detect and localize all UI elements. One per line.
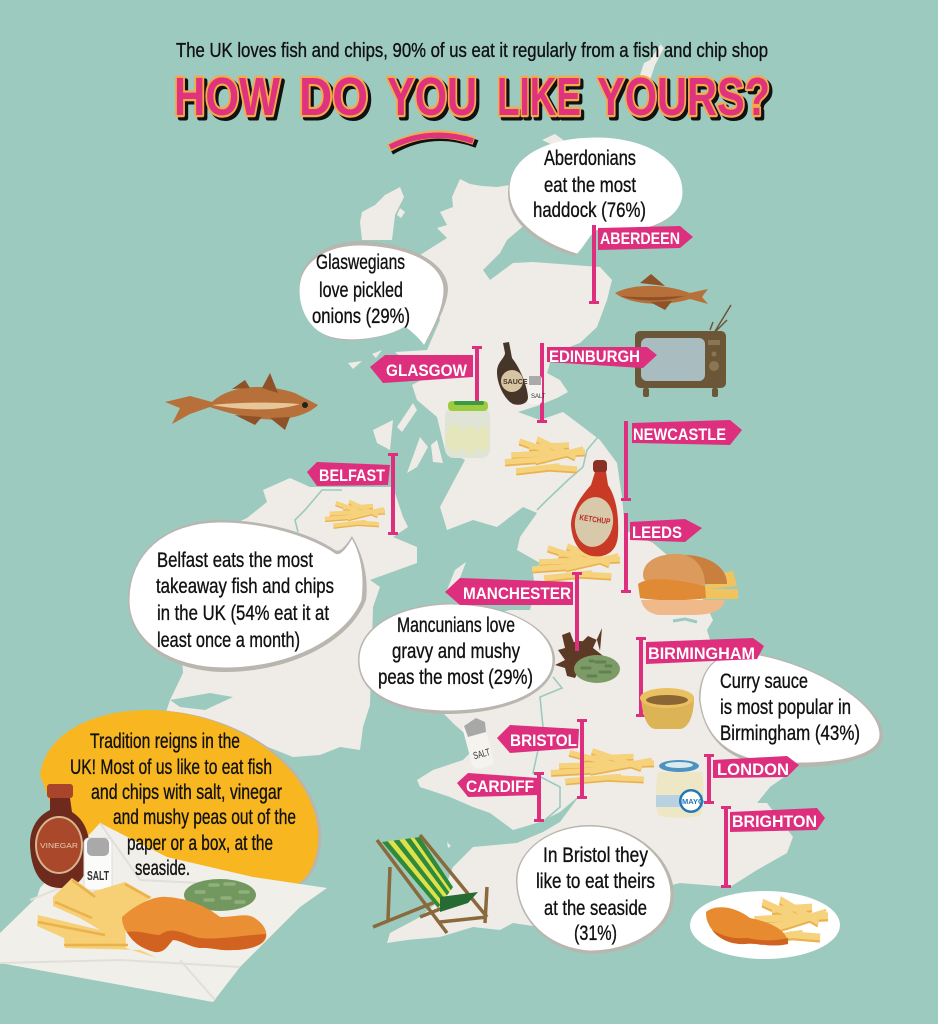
banner: Glasgow	[370, 346, 482, 407]
icon: salt shaker: SALT	[472, 747, 491, 762]
bubble: Belfast: Belfast eats the most	[157, 549, 313, 572]
title: YOURS?	[597, 67, 770, 127]
title: YOURS?	[600, 70, 773, 130]
icon: salt shaker	[84, 838, 112, 890]
banner: Belfast	[307, 453, 398, 535]
panel: tradition callout: and mushy peas out of the	[113, 806, 296, 829]
title: LIKE	[497, 67, 581, 127]
bubble: Aberdeen: haddock (76%)	[533, 199, 646, 222]
bubble: Birmingham: is most popular in	[720, 696, 851, 719]
title: YOU	[387, 67, 477, 127]
banner: Bristol	[497, 719, 587, 799]
bubble: Manchester: Mancunians love	[397, 614, 515, 637]
icon: ketchup bottle: KETCHUP	[579, 513, 611, 526]
icon: ketchup bottle	[571, 460, 618, 556]
icon: mushy peas	[184, 879, 256, 911]
panel: tradition callout: paper or a box, at the	[127, 832, 273, 855]
banner: Brighton	[721, 806, 825, 888]
panel: tradition callout: seaside.	[135, 857, 190, 880]
bubble: Glasgow	[299, 241, 448, 345]
title	[174, 67, 773, 151]
icon: vinegar bottle: VINEGAR	[40, 843, 78, 850]
chips: Belfast	[325, 502, 385, 526]
icon: paper wrap	[0, 823, 327, 1002]
banner: Brighton: BRIGHTON	[732, 813, 817, 831]
banner: Edinburgh: EDINBURGH	[549, 348, 640, 366]
panel: tradition callout: UK! Most of us like to eat fish	[70, 756, 272, 779]
banner: Newcastle	[621, 420, 742, 501]
bubble: Birmingham: Birmingham (43%)	[720, 722, 860, 745]
banner: Cardiff: CARDIFF	[466, 778, 534, 796]
bubble: Bristol	[516, 825, 674, 954]
banner: Newcastle: NEWCASTLE	[633, 426, 726, 444]
bubble: Birmingham: Curry sauce	[720, 670, 808, 693]
banner: Leeds: LEEDS	[632, 524, 682, 542]
panel: tradition callout: and chips with salt, vinegar	[91, 781, 282, 804]
title: HOW	[177, 70, 283, 130]
title: LIKE	[500, 70, 584, 130]
bubble: Aberdeen: eat the most	[544, 174, 636, 197]
banner: Birmingham	[636, 637, 764, 717]
intro text: The UK loves fish and chips, 90% of us eat it regularly from a fish and chip shop	[176, 40, 768, 62]
banner: Birmingham: BIRMINGHAM	[648, 645, 755, 663]
title: DO	[299, 67, 368, 127]
chips: Leeds	[532, 546, 620, 579]
title: DO	[302, 70, 371, 130]
icon: vinegar bottle	[30, 784, 89, 888]
icon: plate with fish and chips	[690, 891, 840, 959]
banner: London: LONDON	[717, 761, 789, 779]
banner: Glasgow: GLASGOW	[386, 362, 467, 380]
banner: Edinburgh	[537, 343, 657, 423]
banner: Aberdeen	[589, 225, 693, 304]
icon: sauce bottle and salt	[497, 342, 546, 405]
banner: Belfast: BELFAST	[319, 467, 385, 485]
bubble: Belfast: in the UK (54% eat it at	[157, 602, 329, 625]
chips: Edinburgh	[505, 439, 585, 472]
bubble: Manchester: peas the most (29%)	[378, 666, 533, 689]
banner: Leeds	[621, 513, 702, 593]
icon: pickled onion jar	[445, 401, 490, 458]
bubble: Belfast	[128, 520, 367, 672]
icon: sauce bottle and salt: SAUCE	[503, 379, 528, 386]
bubble: Glasgow: onions (29%)	[312, 305, 410, 328]
panel: tradition callout: Tradition reigns in the	[90, 730, 240, 753]
bubble: Belfast: takeaway fish and chips	[156, 575, 334, 598]
icon: mayo jar: MAYO	[682, 797, 704, 806]
icon: salt shaker: SALT	[87, 868, 109, 883]
map: islands	[348, 38, 664, 848]
bubble: Glasgow: love pickled	[319, 279, 403, 302]
icon: television	[635, 305, 731, 397]
bubble: Bristol: at the seaside	[544, 897, 647, 920]
title: HOW	[174, 67, 280, 127]
bubble: Aberdeen	[508, 138, 682, 256]
bubble: Bristol: (31%)	[574, 922, 617, 945]
chips: Bristol	[551, 751, 654, 782]
chips: paper	[37, 878, 157, 958]
icon: battered fish	[122, 897, 266, 952]
icon: fish burger	[638, 554, 738, 615]
underline swoosh	[389, 134, 477, 151]
icon: deck chair	[373, 835, 487, 933]
banner: Bristol: BRISTOL	[510, 732, 577, 750]
icon: curry sauce pot	[640, 688, 694, 729]
map: Britain	[387, 179, 800, 943]
panel: tradition callout	[0, 710, 327, 1002]
icon: gravy splat and mushy peas	[555, 628, 620, 683]
bubble: Glasgow: Glaswegians	[316, 251, 405, 274]
banner: Aberdeen: ABERDEEN	[600, 230, 680, 248]
icon: mayo jar	[656, 760, 704, 818]
bubble: Bristol: In Bristol they	[543, 844, 648, 867]
icon: small haddock	[615, 274, 708, 310]
icon: sauce bottle and salt: SALT	[531, 394, 546, 400]
bubble: Bristol: like to eat theirs	[536, 870, 655, 893]
banner: London	[704, 754, 799, 804]
icon: big fish	[165, 373, 318, 430]
bubble: Manchester: gravy and mushy	[392, 640, 520, 663]
banner: Manchester	[445, 572, 582, 651]
bubble: Birmingham	[699, 652, 883, 767]
title: YOU	[390, 70, 480, 130]
icon: salt shaker	[461, 718, 495, 770]
bubble: Belfast: least once a month)	[157, 629, 300, 652]
bubble: Aberdeen: Aberdonians	[544, 147, 636, 170]
map: Ireland	[165, 478, 417, 757]
banner: Cardiff	[457, 772, 544, 822]
banner: Manchester: MANCHESTER	[463, 585, 571, 603]
bubble: Manchester	[358, 603, 555, 714]
